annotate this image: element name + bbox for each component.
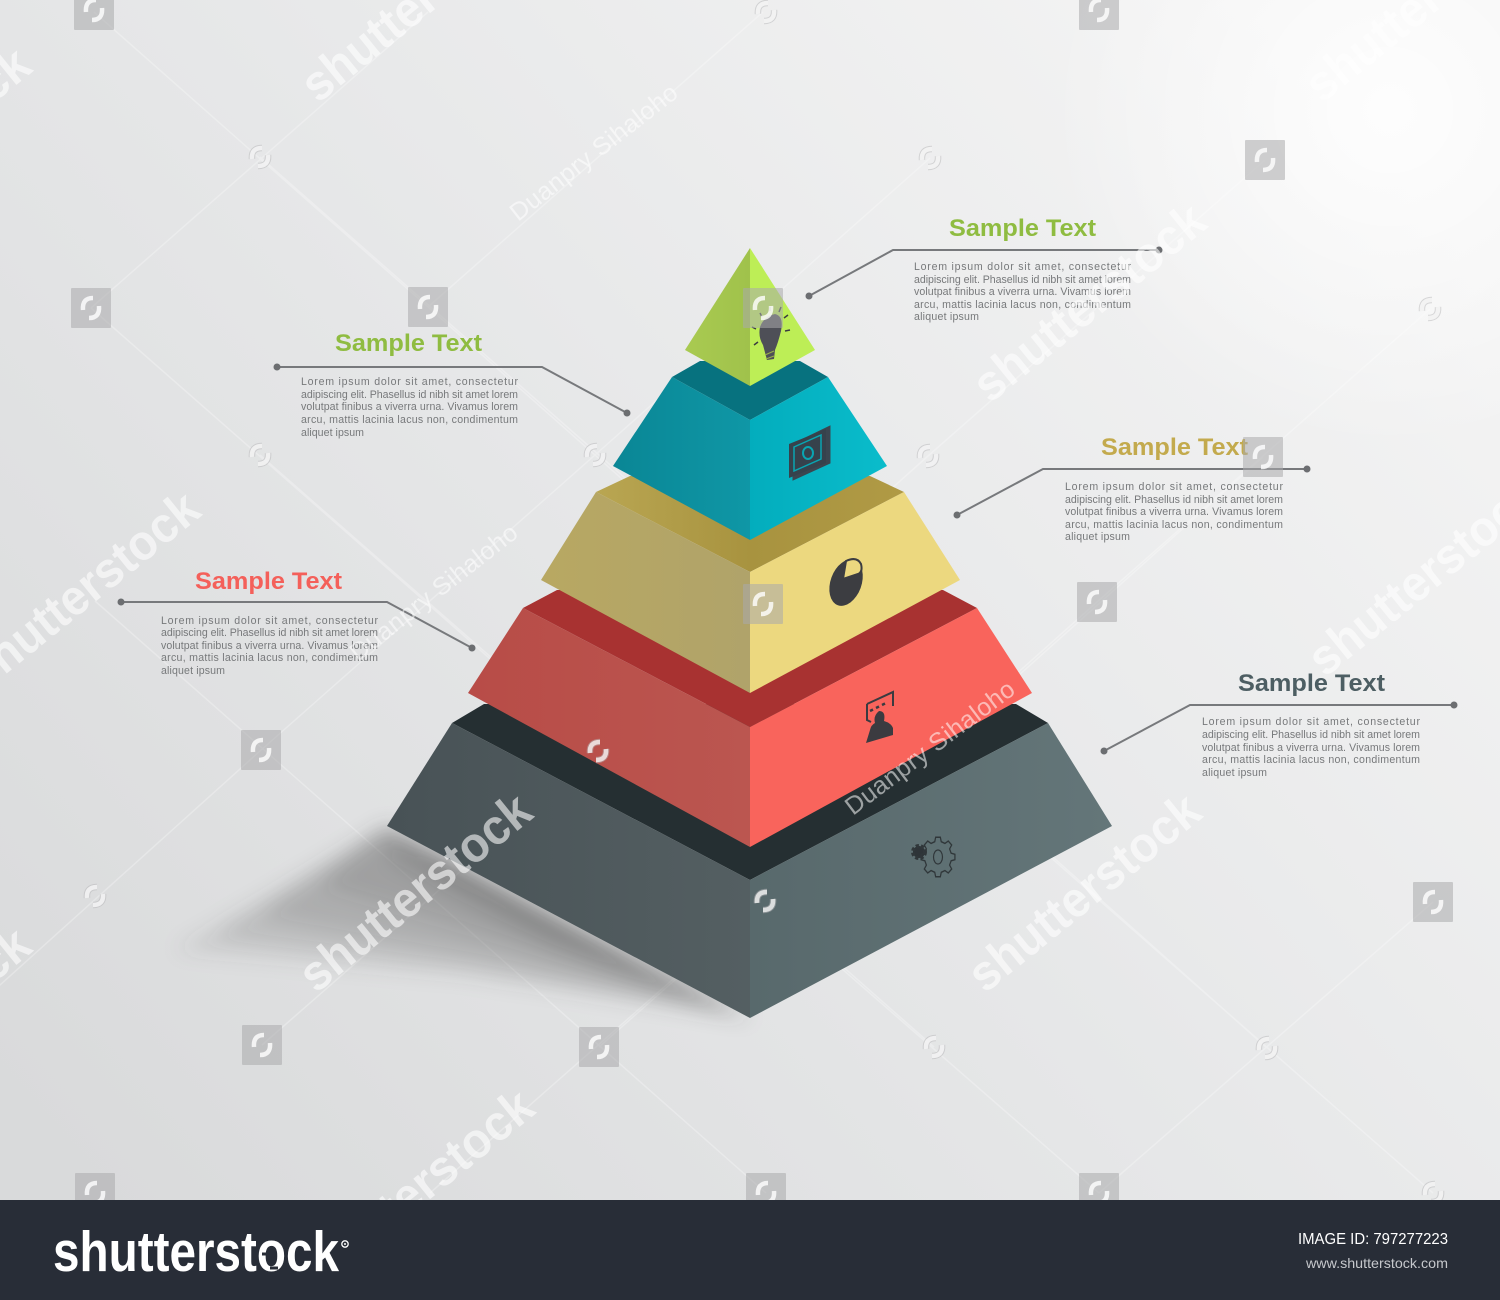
tier 4: red [468,590,1032,847]
body text: arcu, mattis lacinia lacus non, condimentum [1065,519,1283,531]
icon: presenter [866,692,893,743]
watermark: author credit: Duanpry Sihaloho [344,518,523,667]
body text: volutpat finibus a viverra urna. Vivamus lorem [161,640,378,652]
watermark: shutterstock repeated: shutterstock [290,1077,544,1299]
footer bar [0,1200,1500,1300]
body text: arcu, mattis lacinia lacus non, condimentum [301,414,518,426]
body text: Lorem ipsum dolor sit amet, consectetur [161,615,378,627]
body text: adipiscing elit. Phasellus id nibh sit amet lorem [1202,729,1420,741]
body text [914,261,1131,323]
callout: teal tier [301,330,518,439]
heading: Sample Text [195,568,342,595]
callout: gray tier [1202,670,1420,779]
watermark: shutterstock repeated: shutterstock [288,781,542,1003]
callout: red tier [161,568,378,677]
body text: Lorem ipsum dolor sit amet, consectetur [914,261,1131,273]
leader dots [118,246,1458,754]
body text: Lorem ipsum dolor sit amet, consectetur [301,376,518,388]
heading: Sample Text [949,215,1096,242]
body text [1202,716,1420,779]
body text: arcu, mattis lacinia lacus non, condimentum [161,652,378,664]
tier 3: yellow [541,476,960,693]
body text: aliquet ipsum [914,311,979,323]
watermark: author credit: Duanpry Sihaloho [840,675,1020,821]
tier 1: green apex [685,248,815,386]
body text: adipiscing elit. Phasellus id nibh sit amet lorem [914,274,1131,286]
pyramid shadow [175,826,750,1018]
watermark: shutterstock repeated: shutterstock [957,781,1211,1003]
watermark: author credit: Duanpry Sihaloho [504,78,683,227]
heading: Sample Text [1238,670,1385,697]
icon: light bulb [752,307,790,360]
watermark: shutterstock repeated: shutterstock [962,191,1216,413]
body text: Lorem ipsum dolor sit amet, consectetur [1065,481,1283,493]
footer logo: shutterstock [53,1220,339,1284]
icon: gears [913,837,955,877]
body text: arcu, mattis lacinia lacus non, condimentum [1202,754,1420,766]
body text: adipiscing elit. Phasellus id nibh sit amet lorem [1065,494,1283,506]
site address: www.shutterstock.com [1305,1255,1448,1271]
body text [1065,481,1283,543]
body text: volutpat finibus a viverra urna. Vivamus lorem [1202,742,1420,754]
body text [301,376,518,439]
callout: top green [914,215,1131,323]
leader lines [121,250,1454,751]
tier 2: teal [613,361,887,540]
body text: adipiscing elit. Phasellus id nibh sit amet lorem [161,627,378,639]
heading: Sample Text [1101,434,1248,461]
body text: aliquet ipsum [301,427,364,439]
pyramid [387,248,1112,1018]
body text: adipiscing elit. Phasellus id nibh sit amet lorem [301,389,518,401]
body text: aliquet ipsum [1202,767,1267,779]
body text: arcu, mattis lacinia lacus non, condimentum [914,299,1131,311]
icon: pie chart [823,555,869,611]
heading: Sample Text [335,330,482,357]
body text: aliquet ipsum [161,665,225,677]
body text: aliquet ipsum [1065,531,1130,543]
image id: IMAGE ID: 797277223 [1298,1231,1448,1248]
icon: banknotes [789,426,830,480]
body text: volutpat finibus a viverra urna. Vivamus lorem [914,286,1131,298]
body text [161,615,378,677]
body text: Lorem ipsum dolor sit amet, consectetur [1202,716,1420,728]
body text: volutpat finibus a viverra urna. Vivamus lorem [301,401,518,413]
body text: volutpat finibus a viverra urna. Vivamus lorem [1065,506,1283,518]
callout: yellow tier [1065,434,1283,543]
tier 5: gray base [387,704,1112,1018]
watermark: author credit [344,78,1020,821]
